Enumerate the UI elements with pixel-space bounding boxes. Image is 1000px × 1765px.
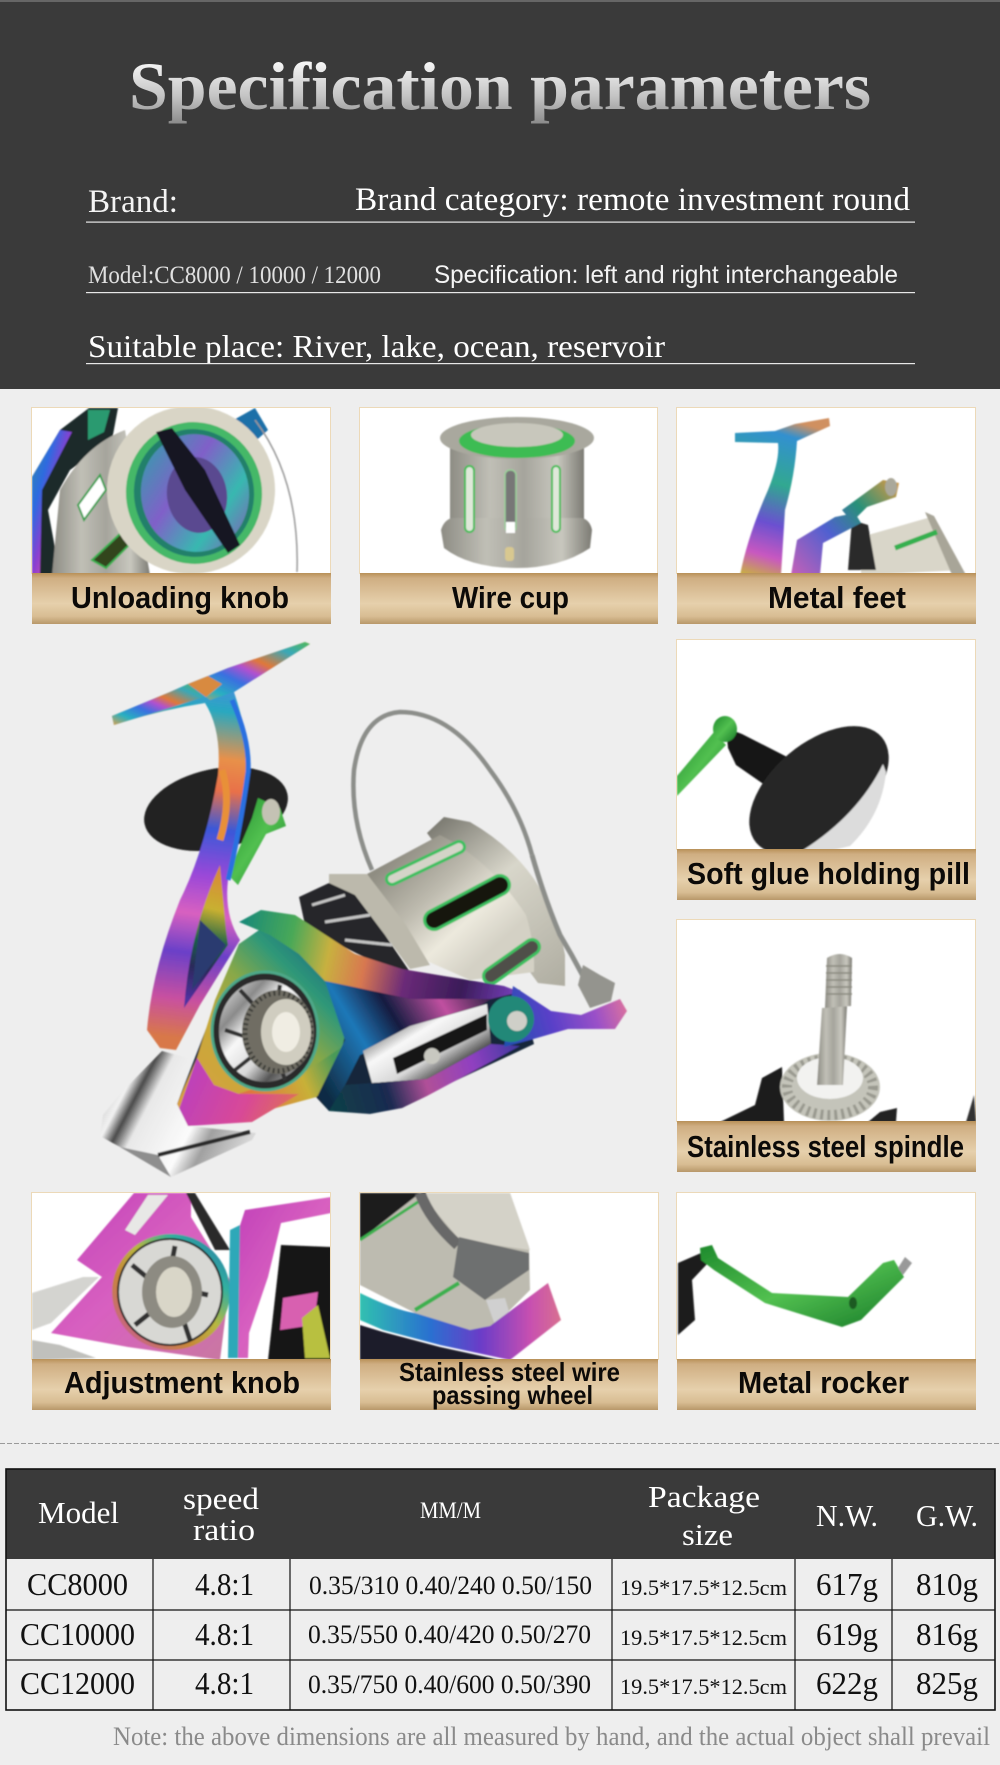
table row: CC10000: 19.5*17.5*12.5cm — [620, 1625, 787, 1650]
icon: spool — [299, 817, 565, 986]
icon: adjustment knob photo — [32, 1193, 331, 1360]
panel: stainless steel spindle — [676, 920, 976, 1172]
panel: stainless steel wire passing wheel — [360, 1192, 658, 1410]
table row: CC10000 — [20, 1616, 978, 1652]
icon: chrome panel — [363, 1004, 491, 1083]
icon: lower iridescent trim — [329, 1044, 520, 1114]
table header row: MM/M — [420, 1498, 481, 1523]
table row: CC10000: 619g — [816, 1616, 878, 1652]
panel: adjustment knob — [32, 1192, 331, 1410]
caption: unloading knob — [32, 573, 331, 624]
icon: blue lower section — [318, 981, 491, 1111]
table row: CC10000: 0.35/550 0.40/420 0.50/270 — [308, 1620, 591, 1649]
table row: CC12000: 622g — [816, 1665, 878, 1701]
icon: green crank arm — [228, 798, 286, 885]
icon: handle knob — [136, 755, 296, 863]
panel: wire cup — [360, 408, 658, 624]
model line: Model:CC8000 / 10000 / 12000 — [88, 262, 381, 289]
table row: CC10000: CC10000 — [20, 1616, 135, 1652]
icon: spindle photo — [720, 954, 976, 1122]
table header row: size — [682, 1517, 733, 1552]
caption: metal rocker — [677, 1359, 976, 1410]
table header row: Model — [38, 1495, 119, 1530]
caption: wire cup — [360, 573, 658, 624]
panel: specification header — [0, 0, 1000, 389]
table header row: speed — [183, 1481, 260, 1516]
panel: soft glue holding pill — [676, 640, 976, 900]
brand label: Brand: — [88, 184, 178, 220]
caption: adjustment knob — [32, 1359, 331, 1410]
icon: wire cup photo — [440, 417, 594, 568]
suitable place line: Suitable place: River, lake, ocean, reservoir — [88, 328, 665, 364]
title: Specification parameters — [129, 48, 871, 124]
caption: metal rocker: Metal rocker — [738, 1365, 909, 1400]
table header row: G.W. — [916, 1498, 978, 1533]
icon: stem and bail arm — [112, 642, 310, 1050]
icon: metal rocker photo — [678, 1245, 912, 1335]
caption: wire passing wheel — [360, 1357, 658, 1410]
specification line: Specification: left and right interchangeable — [434, 261, 898, 289]
table header row — [6, 1469, 995, 1559]
specification table — [6, 1469, 995, 1710]
panel: unloading knob — [32, 395, 331, 624]
icon: wire passing wheel photo — [360, 1193, 561, 1360]
icon: stem window — [184, 865, 228, 1008]
caption: stainless steel spindle — [677, 1121, 976, 1172]
icon: upper rainbow lobe — [239, 910, 520, 999]
icon: gold disk surround — [177, 928, 345, 1126]
table row: CC8000 — [27, 1566, 978, 1602]
caption: metal feet: Metal feet — [768, 580, 906, 615]
table row: CC8000: 0.35/310 0.40/240 0.50/150 — [309, 1571, 592, 1600]
icon: silver head — [100, 1051, 256, 1177]
table row: CC8000: 810g — [916, 1566, 978, 1602]
caption: wire cup: Wire cup — [452, 580, 569, 615]
table header row: ratio — [193, 1512, 255, 1547]
table row: CC10000: 4.8:1 — [195, 1616, 254, 1652]
table row: CC12000: 19.5*17.5*12.5cm — [620, 1674, 787, 1699]
icon: soft glue handle photo — [677, 715, 890, 849]
panel: metal rocker — [676, 1192, 976, 1410]
icon: wire bail front — [532, 855, 583, 976]
table row: CC12000: 825g — [916, 1665, 978, 1701]
caption: adjustment knob: Adjustment knob — [64, 1365, 300, 1400]
icon: wire bail rear — [353, 712, 532, 870]
caption: metal feet — [677, 573, 976, 624]
caption: wire passing wheel: Stainless steel wire — [399, 1357, 620, 1387]
icon: main disk and knob — [212, 972, 318, 1090]
table row: CC12000: 4.8:1 — [195, 1665, 254, 1701]
icon: right tail — [504, 986, 627, 1047]
icon: body shadow base — [177, 926, 534, 1126]
table row: CC8000: 19.5*17.5*12.5cm — [620, 1575, 787, 1600]
table row: CC8000: 4.8:1 — [195, 1566, 254, 1602]
caption: soft glue holding pill: Soft glue holding pill — [687, 856, 970, 891]
icon: pivot screw — [488, 996, 534, 1042]
caption: unloading knob: Unloading knob — [71, 580, 289, 615]
icon: unloading knob photo — [32, 408, 299, 573]
table row: CC12000 — [20, 1665, 978, 1701]
table header row: Package — [648, 1479, 760, 1514]
table row: CC8000: CC8000 — [27, 1566, 128, 1602]
caption: soft glue holding pill — [677, 849, 976, 900]
icon: magenta head panel — [177, 1058, 299, 1126]
table row: CC8000: 617g — [816, 1566, 878, 1602]
table row: CC10000: 816g — [916, 1616, 978, 1652]
table row: CC12000: CC12000 — [20, 1665, 135, 1701]
caption: wire passing wheel: passing wheel — [432, 1380, 593, 1410]
panel: metal feet — [676, 408, 976, 624]
table header row: N.W. — [816, 1498, 878, 1533]
icon: metal feet photo — [735, 418, 966, 575]
brand category: Brand category: remote investment round — [355, 182, 910, 218]
table row: CC12000: 0.35/750 0.40/600 0.50/390 — [308, 1670, 591, 1699]
main reel photo — [100, 642, 627, 1177]
